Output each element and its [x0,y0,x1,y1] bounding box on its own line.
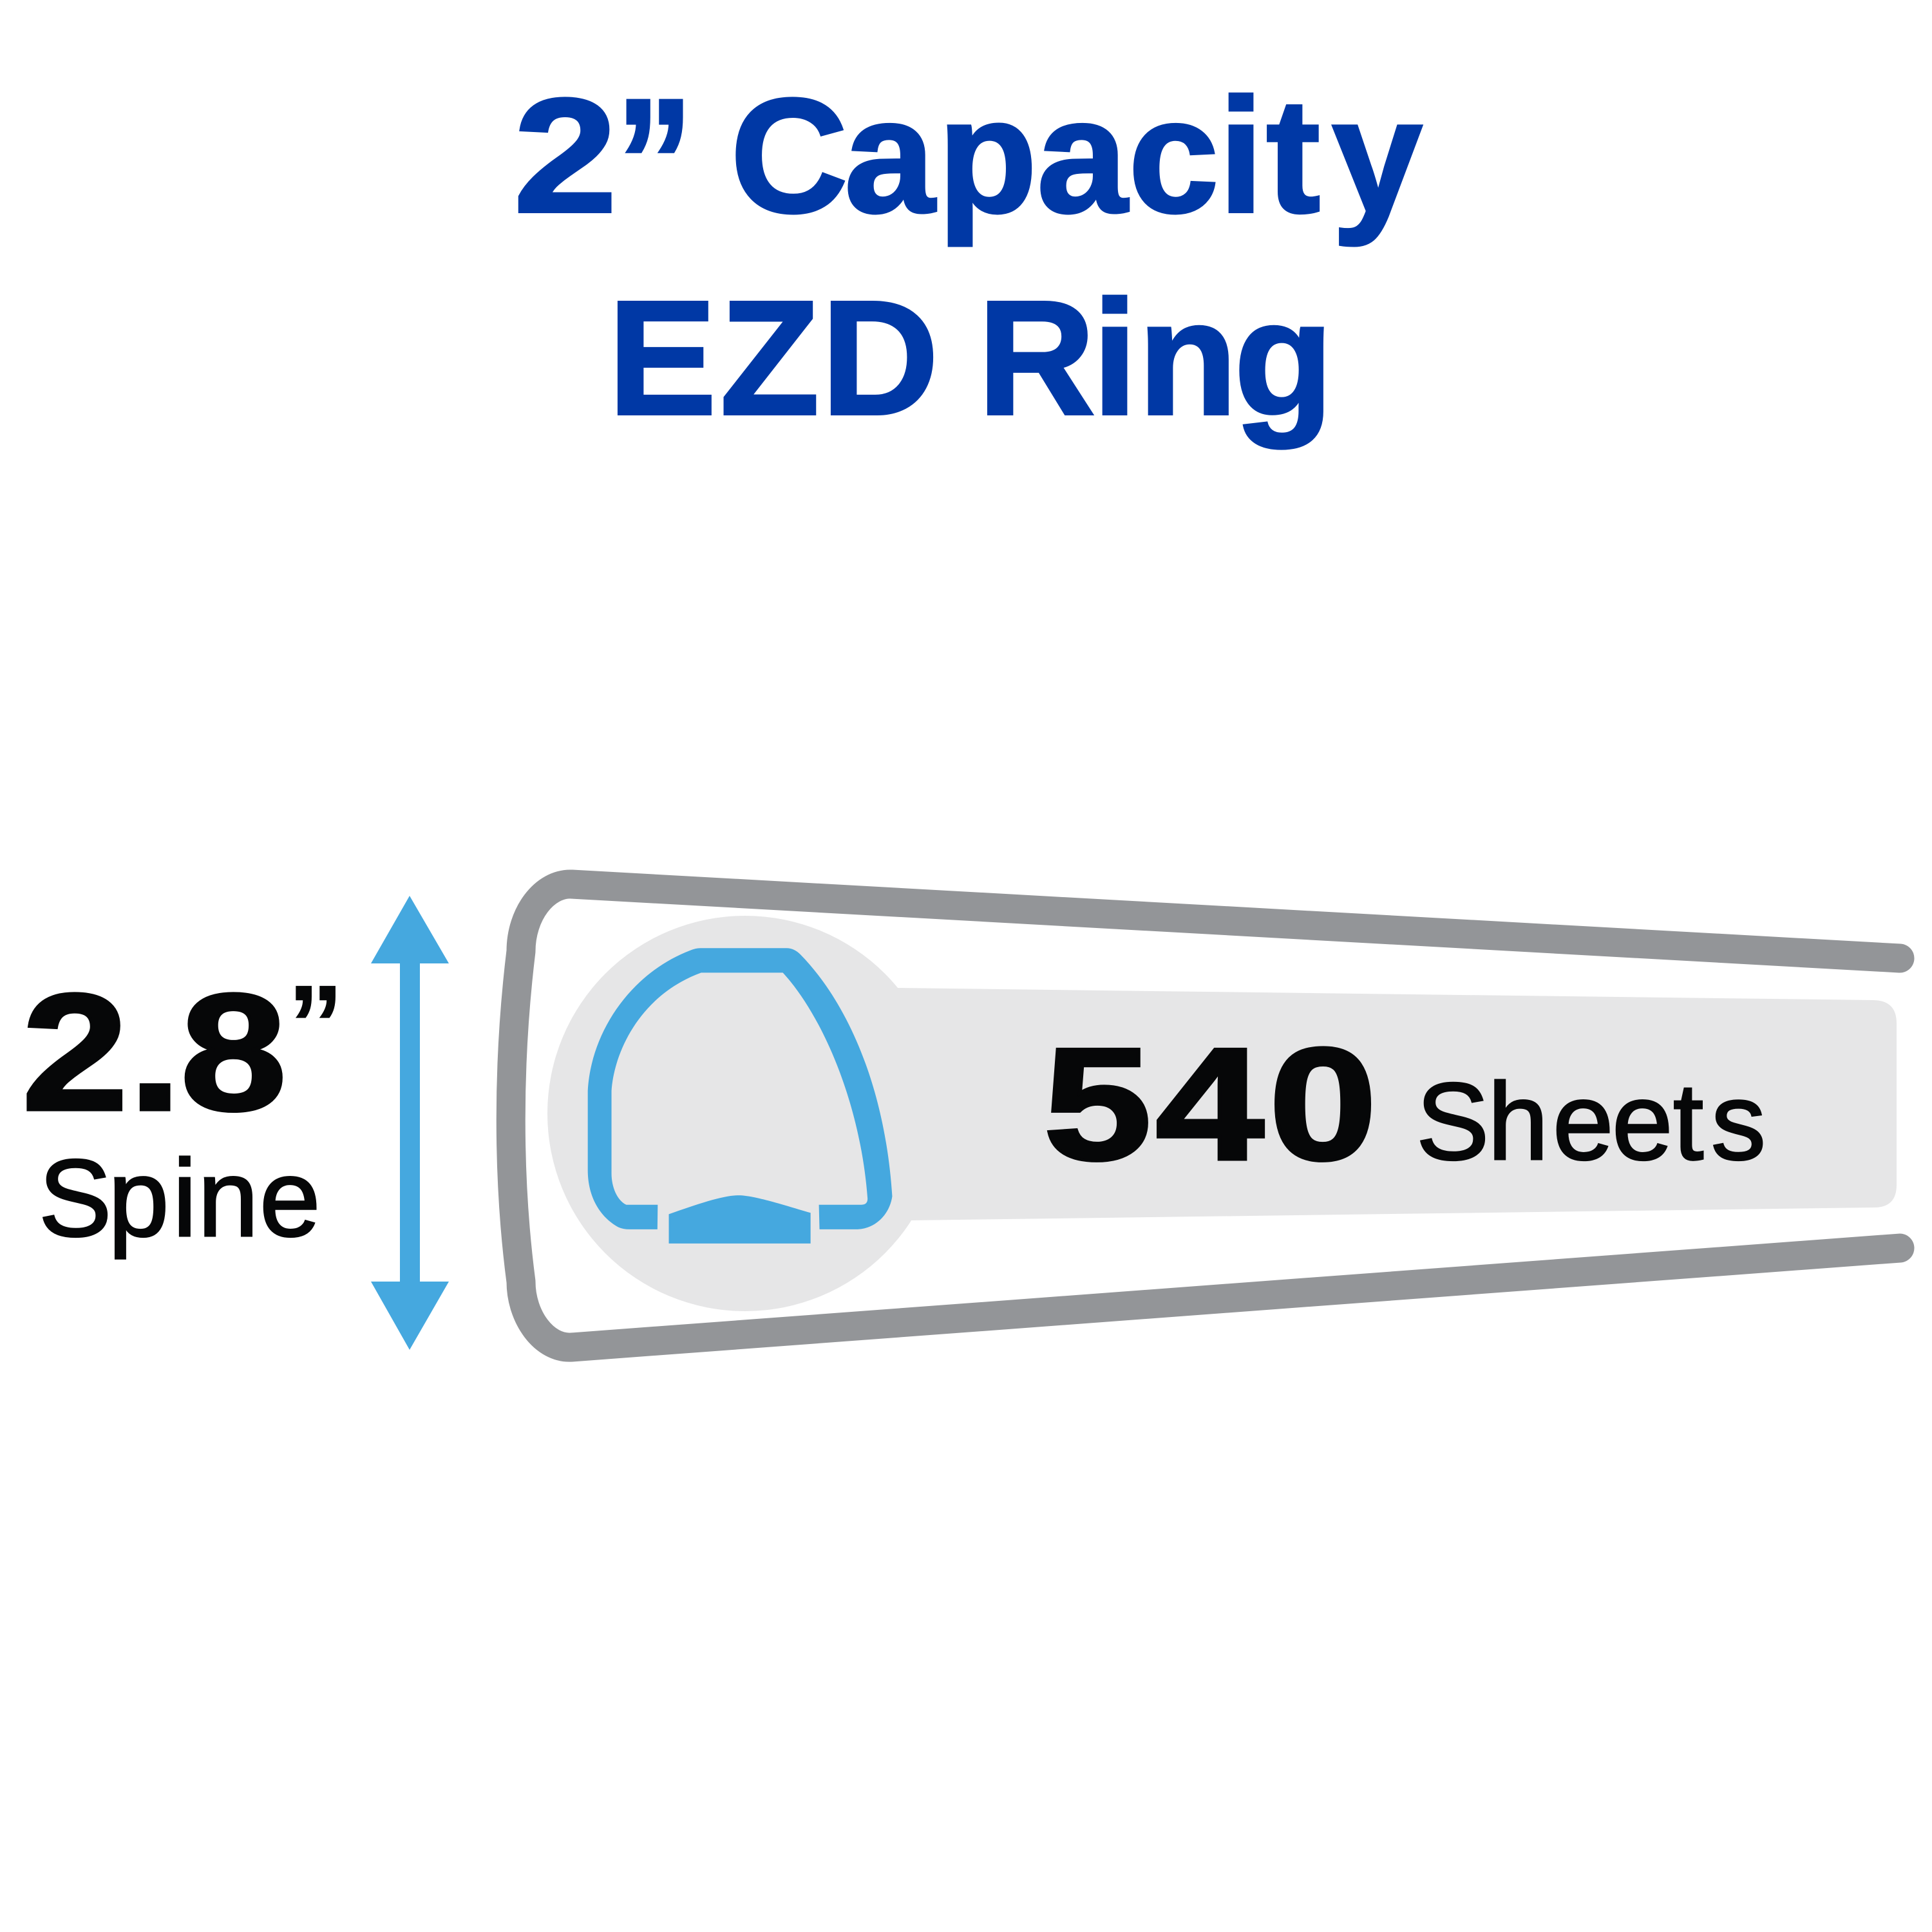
ring base [669,1195,811,1244]
title line 2: EZD Ring [608,267,1334,449]
panel: sheet capacity callout background [547,916,1897,1311]
text: spine measurement [22,959,344,1260]
text: 540 sheets [1043,1015,1766,1193]
title [513,60,1423,449]
label Sheets: Sheets [1416,1061,1766,1183]
number 2.8: 2.8 [22,959,287,1145]
title line 1: ” [616,60,694,265]
label Spine: Spine [39,1137,321,1260]
inch mark: ” [287,962,344,1088]
icon: binder cross-section outline [511,884,1900,1347]
title line 1: Capacity [730,64,1423,247]
title line 1 [513,60,1423,265]
icon: EZD ring [588,948,892,1244]
ring arc [588,948,892,1229]
number 540: 540 [1043,1015,1377,1193]
title line 1: 2 [513,64,618,247]
arrow: spine height double arrow [371,896,449,1350]
